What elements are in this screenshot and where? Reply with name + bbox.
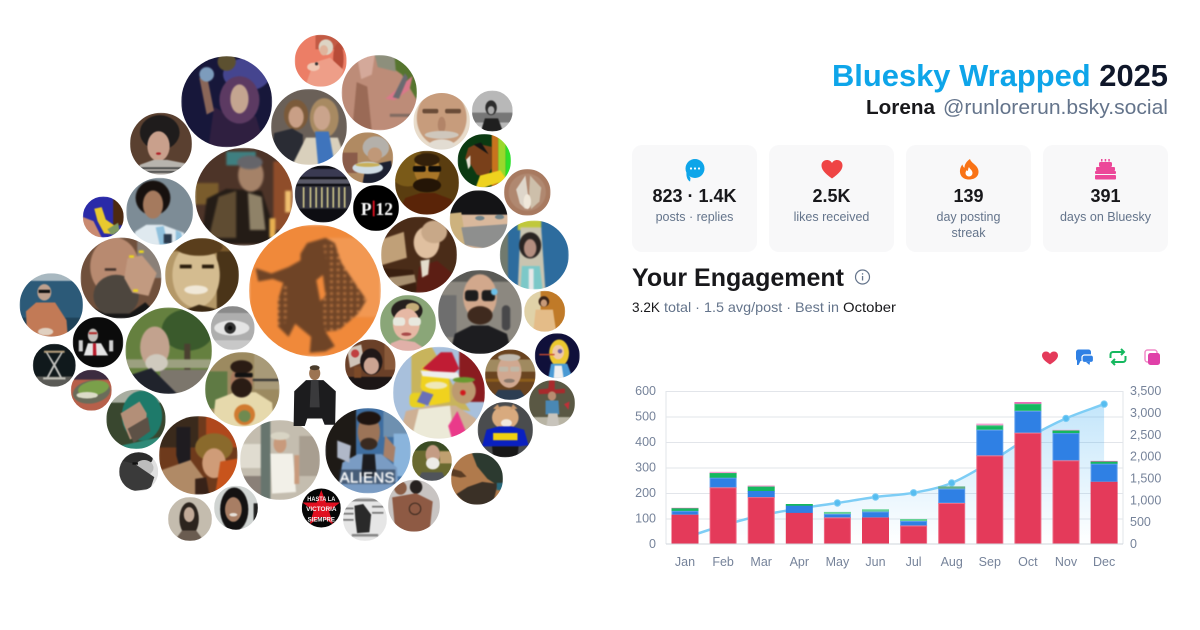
month labels: May — [826, 555, 850, 569]
stat card: posting streak: 139 — [953, 186, 984, 206]
avatar: Hasta la victoria siempre — [302, 488, 341, 528]
cumulative dots — [834, 401, 1107, 506]
month labels: Jun — [865, 555, 886, 569]
engagement summary: total · 1.5 avg/post · Best in — [664, 299, 839, 315]
avatar: grey photo of woman — [472, 90, 513, 132]
icon: chat bubble — [686, 159, 704, 182]
avatar: Hasta la victoria siempre: VICTORIA — [306, 507, 337, 513]
stat card: days on Bluesky: 391 — [1090, 186, 1121, 206]
avatar: bearded face closeup — [451, 453, 503, 505]
right axis labels — [1130, 384, 1161, 551]
bar: Feb — [710, 472, 737, 544]
avatar: bearded man with guitar mic — [205, 352, 280, 427]
bar: Apr — [786, 504, 813, 544]
stat card: days on Bluesky — [1043, 145, 1168, 252]
right axis labels: 500 — [1130, 515, 1151, 529]
month labels: Sep — [979, 555, 1001, 569]
stat card: days on Bluesky: days on Bluesky — [1060, 210, 1152, 224]
icon: replies legend — [1076, 350, 1094, 365]
avatar: ALIENS meme: ALIENS — [340, 469, 395, 486]
baseline — [666, 543, 1123, 545]
avatar: man with bowl — [342, 132, 393, 183]
left axis labels: 300 — [635, 460, 656, 474]
avatar: man with sunglasses and moustache — [395, 150, 459, 215]
avatar: painted hands — [504, 169, 551, 216]
cumulative line — [685, 404, 1104, 538]
avatar: Simpsons style woman — [393, 347, 485, 439]
icon: birthday cake — [1095, 159, 1116, 180]
heading: Your Engagement: Your Engagement — [632, 264, 845, 292]
stat card: posts and replies: 823 · 1.4K — [652, 186, 737, 206]
stat card: likes received: 2.5K — [812, 186, 851, 206]
right axis labels: 1,000 — [1130, 494, 1161, 508]
user name: Lorena — [866, 97, 936, 119]
engagement summary: 3.2K — [632, 299, 661, 315]
avatar: Maradona — [126, 178, 193, 245]
avatar: sepia girl — [168, 497, 212, 541]
month labels: Jul — [906, 555, 922, 569]
engagement summary: October — [843, 299, 896, 315]
bar: Mar — [748, 485, 775, 544]
avatar: woman in peach — [524, 291, 565, 332]
avatar: yellow cartoon on blue — [83, 196, 124, 238]
bar: May — [824, 512, 851, 544]
avatar: eyes and knit mask — [450, 190, 508, 248]
left axis labels: 100 — [635, 512, 656, 526]
icon: heart — [822, 160, 842, 178]
right axis labels: 2,000 — [1130, 450, 1161, 464]
avatar: audio mixer — [295, 166, 352, 222]
chart: monthly engagement — [635, 384, 1161, 569]
avatar: Maradona mural — [500, 220, 569, 290]
avatar: hourglass — [33, 344, 76, 387]
avatar: man with white beard — [412, 441, 452, 481]
avatar: P12 logo — [353, 185, 399, 231]
avatar: two women at rally — [271, 89, 347, 165]
avatar: tattooed shoulder — [342, 55, 417, 130]
avatar: ALIENS meme — [325, 408, 411, 493]
left axis labels: 600 — [635, 384, 656, 398]
right axis labels: 1,500 — [1130, 472, 1161, 486]
avatar: Boca dog — [478, 402, 533, 457]
icon: likes legend — [1042, 352, 1058, 364]
stat card: likes received — [769, 145, 894, 252]
avatar: Hasta la victoria siempre: SIEMPRE — [308, 517, 335, 523]
avatar: singer with microphone — [181, 53, 272, 147]
month labels: Jan — [675, 555, 695, 569]
avatar: curly haired woman — [130, 113, 192, 175]
avatar: bald man with yellow nails — [80, 238, 162, 318]
avatar: black and white print — [343, 497, 387, 541]
avatar: man in green hood — [106, 390, 166, 449]
month labels: Aug — [941, 555, 963, 569]
avatar: eye closeup — [211, 306, 255, 350]
avatar: black shirt with figure — [73, 317, 123, 368]
avatar: painting of woman — [159, 416, 238, 495]
bar: Jul — [900, 519, 927, 544]
avatar: bald man by a tree — [125, 307, 214, 394]
cumulative area — [685, 404, 1104, 544]
bar: Aug — [938, 486, 965, 544]
user handle: @runlorerun.bsky.social — [943, 97, 1168, 119]
avatar: Hasta la victoria siempre: HASTA LA — [307, 497, 336, 503]
avatar bubble cluster — [20, 35, 580, 541]
stat card: posts and replies — [632, 145, 757, 252]
avatar: man in leather jacket at bar — [195, 148, 293, 246]
left axis labels: 500 — [635, 410, 656, 424]
stat card: posting streak — [906, 145, 1031, 252]
bar: Jan — [672, 508, 698, 544]
avatar: older man with glasses and books — [485, 349, 536, 400]
month labels: Oct — [1018, 555, 1038, 569]
icon: info — [856, 270, 870, 284]
chart grid — [666, 391, 1123, 544]
stat card: posting streak: day posting — [937, 210, 1001, 224]
stat card: posting streak: streak — [951, 226, 986, 240]
avatar: Alice cartoon — [535, 333, 580, 378]
avatar: older woman in pink — [295, 35, 347, 87]
month labels: Apr — [790, 555, 809, 569]
avatar: Mozart portrait — [381, 217, 457, 293]
left axis labels: 400 — [635, 435, 656, 449]
left axis labels: 0 — [649, 537, 656, 551]
title: Bluesky Wrapped 2025 — [832, 59, 1168, 93]
avatar: P12 logo: P — [361, 199, 372, 219]
left axis labels: 200 — [635, 486, 656, 500]
stat card: posts and replies: posts · replies — [656, 210, 733, 224]
avatar: bald cartoon man with sunglasses — [438, 270, 522, 354]
left axis labels — [635, 384, 656, 551]
avatar: mirrored sunglass lens — [71, 370, 112, 411]
avatar: cartoon woman with glasses — [380, 295, 436, 351]
avatar: man in black leather jacket — [294, 365, 336, 426]
month labels: Feb — [712, 555, 734, 569]
right axis labels: 3,500 — [1130, 384, 1161, 398]
month labels — [675, 555, 1115, 569]
month labels: Mar — [750, 555, 772, 569]
bar: Dec — [1091, 461, 1118, 544]
month labels: Nov — [1055, 555, 1078, 569]
bar: Oct — [1014, 402, 1041, 544]
avatar: woman with dark bangs — [345, 339, 396, 390]
right axis labels: 2,500 — [1130, 428, 1161, 442]
avatar: orange silhouette figure — [249, 225, 381, 357]
avatar: red scarecrow — [529, 380, 575, 426]
month labels: Dec — [1093, 555, 1115, 569]
icon: reposts legend — [1110, 349, 1126, 365]
stat card: likes received: likes received — [794, 210, 869, 224]
icon: quotes legend — [1145, 350, 1160, 365]
avatar: cartoon horse — [458, 134, 511, 187]
avatar: man with grey moustache — [414, 93, 470, 150]
right axis labels: 3,000 — [1130, 406, 1161, 420]
avatar: old man at the sea — [20, 273, 83, 337]
avatar: man in white t-shirt — [240, 420, 320, 500]
bar: Sep — [976, 424, 1003, 544]
avatar: tattooed back — [388, 480, 440, 532]
engagement summary — [632, 299, 896, 315]
avatar: woman with long dark hair — [214, 486, 258, 531]
avatar: sepia smiling man — [165, 238, 239, 312]
right axis labels: 0 — [1130, 537, 1137, 551]
avatar: black and white bearded face — [119, 450, 158, 491]
avatar: P12 logo: 12 — [376, 199, 393, 219]
legend icons — [1042, 349, 1160, 365]
bar: Jun — [862, 509, 889, 544]
icon: flame — [960, 159, 979, 180]
bar: Nov — [1052, 430, 1080, 544]
